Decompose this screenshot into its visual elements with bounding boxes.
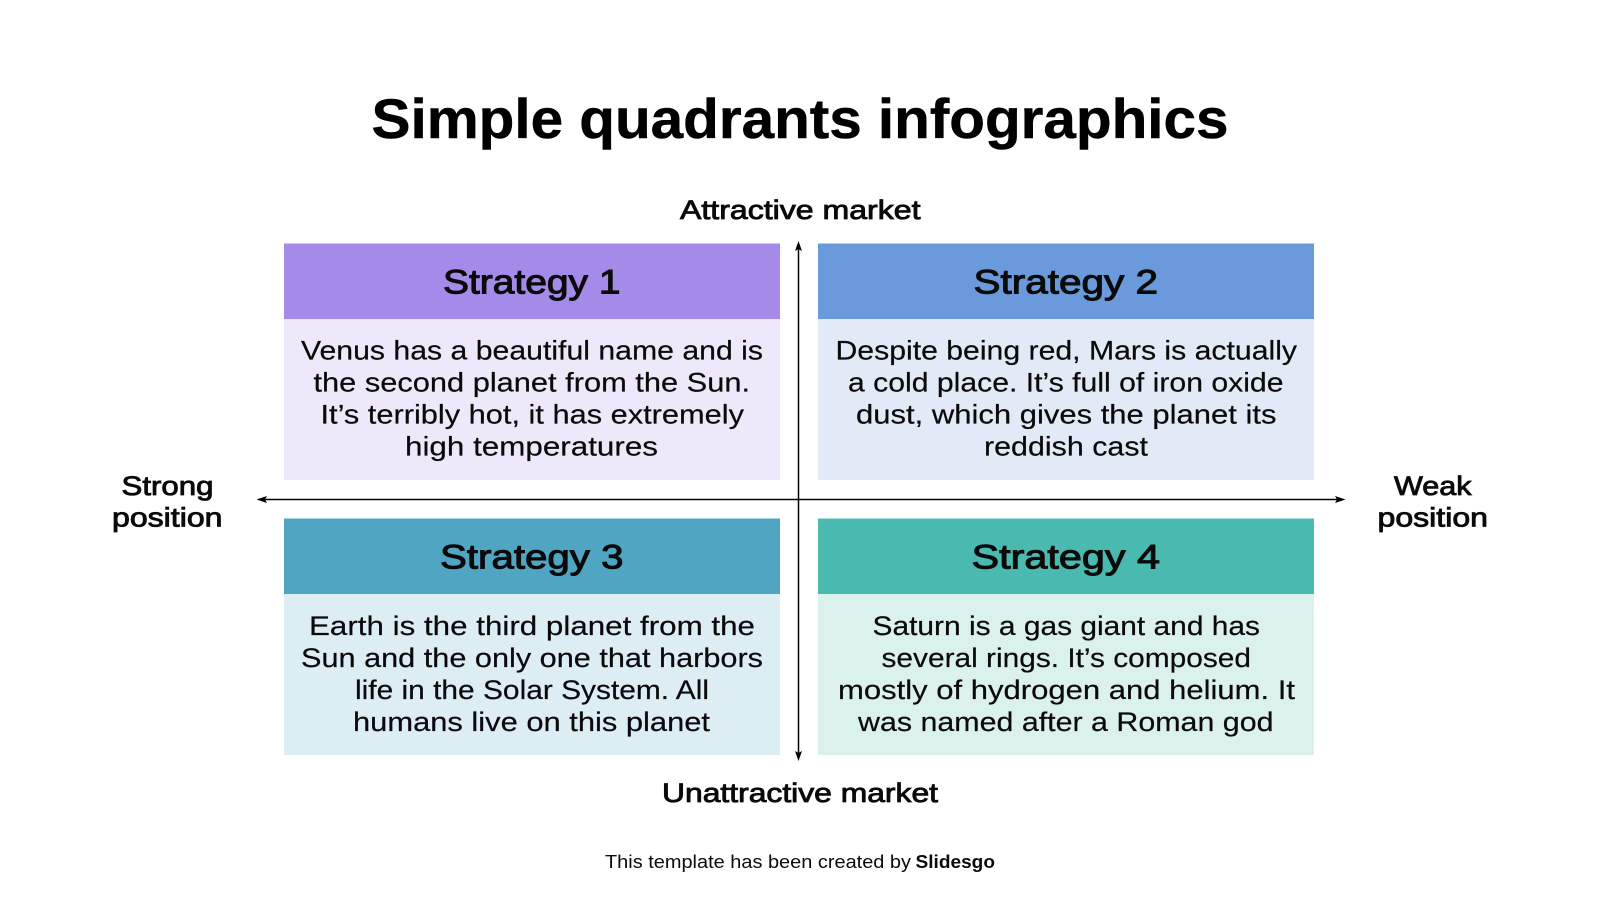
strategy 1 description xyxy=(301,336,763,462)
strategy 2 description: reddish cast xyxy=(984,432,1149,462)
strategy 2 description: Despite being red, Mars is actually xyxy=(836,336,1298,366)
strategy 3 description: life in the Solar System. All xyxy=(355,675,709,705)
strategy 1 description: high temperatures xyxy=(405,432,658,462)
footer credit: This template has been created by xyxy=(605,851,912,872)
panel: strategy 2 xyxy=(818,244,1314,480)
strategy 4 description xyxy=(838,611,1296,737)
axis label: left xyxy=(112,471,222,532)
strategy 3 header bar xyxy=(284,518,780,594)
arrow: horizontal axis xyxy=(256,496,1346,503)
strategy 3 body background xyxy=(284,594,780,755)
axis label: left: position xyxy=(112,502,222,532)
strategy 3 description: humans live on this planet xyxy=(353,707,711,737)
strategy 1 header bar xyxy=(284,244,780,319)
strategy 1 description: It’s terribly hot, it has extremely xyxy=(320,400,745,430)
footer credit: Slidesgo xyxy=(916,851,995,872)
title: Simple quadrants infographics xyxy=(372,87,1228,150)
panel: strategy 1 xyxy=(284,244,780,480)
arrow: vertical axis xyxy=(795,241,802,761)
strategy 1 description: the second planet from the Sun. xyxy=(314,368,750,398)
strategy 1 body background xyxy=(284,319,780,480)
strategy 2 description xyxy=(836,336,1298,462)
axis label: left: Strong xyxy=(122,471,214,501)
axis label: right: position xyxy=(1378,502,1488,532)
strategy 1 description: Venus has a beautiful name and is xyxy=(301,336,763,366)
strategy 1 heading: Strategy 1 xyxy=(443,264,620,302)
strategy 2 description: dust, which gives the planet its xyxy=(856,400,1276,430)
strategy 2 header bar xyxy=(818,244,1314,319)
strategy 4 description: Saturn is a gas giant and has xyxy=(872,611,1260,641)
strategy 3 description xyxy=(301,611,763,737)
strategy 3 description: Earth is the third planet from the xyxy=(309,611,755,641)
strategy 3 description: Sun and the only one that harbors xyxy=(301,643,763,673)
strategy 4 description: mostly of hydrogen and helium. It xyxy=(838,675,1296,705)
strategy 2 heading: Strategy 2 xyxy=(974,264,1158,302)
panel: strategy 3 xyxy=(284,518,780,755)
strategy 4 description: was named after a Roman god xyxy=(857,707,1274,737)
strategy 3 heading: Strategy 3 xyxy=(440,538,624,576)
strategy 4 heading: Strategy 4 xyxy=(972,538,1160,576)
panel: strategy 4 xyxy=(818,518,1314,755)
strategy 4 body background xyxy=(818,594,1314,755)
axis label: top: Attractive market xyxy=(680,195,921,225)
strategy 4 header bar xyxy=(818,518,1314,594)
strategy 4 description: several rings. It’s composed xyxy=(882,643,1251,673)
axis label: right xyxy=(1378,471,1488,532)
axis label: bottom: Unattractive market xyxy=(662,778,939,808)
strategy 2 description: a cold place. It’s full of iron oxide xyxy=(848,368,1284,398)
strategy 2 body background xyxy=(818,319,1314,480)
axis label: right: Weak xyxy=(1394,471,1472,501)
